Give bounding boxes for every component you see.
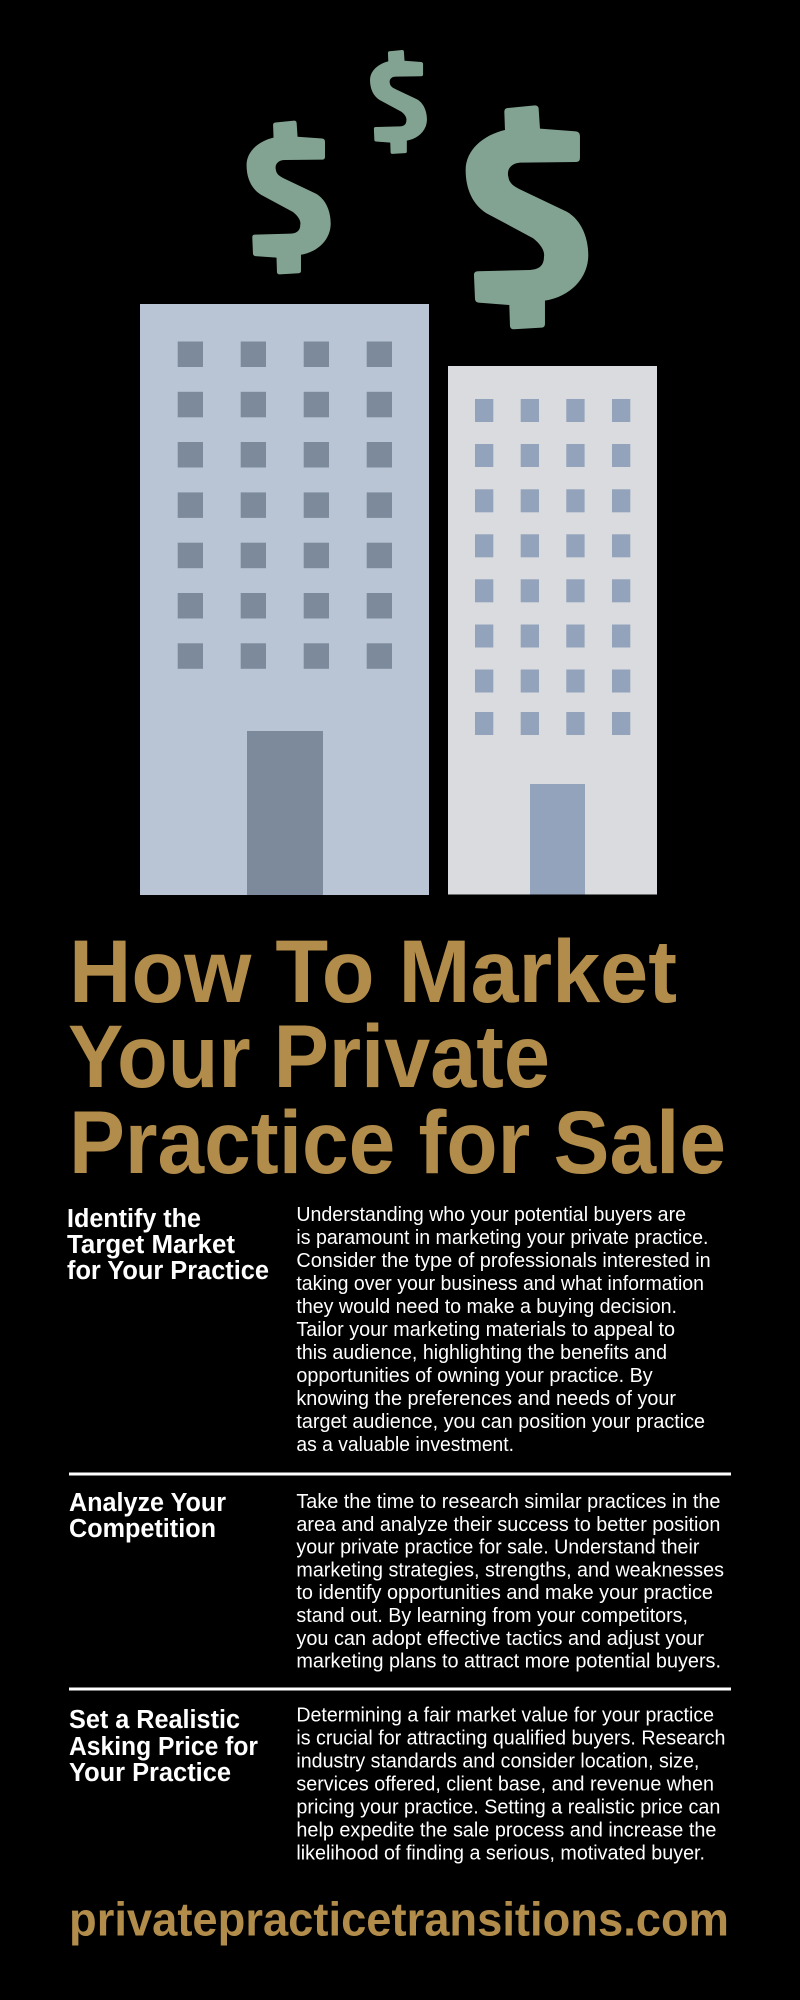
heading: set a realistic asking price: Asking Price for [69, 1733, 258, 1761]
icon: large dollar sign [466, 105, 588, 329]
text block: set a realistic asking price: help expedite the sale process and increase the [296, 1820, 716, 1842]
text block: identify the target market: Understanding who your potential buyers are [296, 1204, 686, 1226]
text block: identify the target market: is paramount in marketing your private practice. [296, 1227, 708, 1249]
text block: identify the target market: as a valuable investment. [296, 1434, 514, 1456]
text block: set a realistic asking price: is crucial for attracting qualified buyers. Research [296, 1728, 725, 1750]
title: How To Market [69, 921, 677, 1021]
heading: identify the target market [67, 1205, 269, 1285]
text block: identify the target market: this audience, highlighting the benefits and [296, 1342, 667, 1364]
text block: analyze your competition: stand out. By learning from your competitors, [296, 1605, 688, 1627]
illustration: dollar signs [247, 50, 588, 329]
heading: identify the target market: for Your Practice [67, 1257, 269, 1285]
icon: small dollar sign [370, 50, 427, 154]
illustration: large building [140, 304, 429, 895]
text block: identify the target market: Tailor your marketing materials to appeal to [296, 1319, 675, 1341]
panel: identify the target market [67, 1204, 711, 1456]
text block: identify the target market: opportunities of owning your practice. By [296, 1365, 653, 1387]
heading: set a realistic asking price: Set a Realistic [69, 1706, 240, 1734]
text block: identify the target market: they would need to make a buying decision. [296, 1296, 677, 1318]
title [68, 921, 726, 1192]
text block: analyze your competition: Take the time to research similar practices in the [296, 1491, 720, 1513]
text block: analyze your competition: to identify opportunities and make your practice [296, 1582, 713, 1604]
heading: analyze your competition: Analyze Your [69, 1489, 226, 1517]
icon: medium dollar sign [247, 121, 331, 274]
text block: set a realistic asking price [296, 1705, 725, 1864]
heading: set a realistic asking price [69, 1706, 258, 1787]
heading: set a realistic asking price: Your Practice [69, 1759, 231, 1787]
heading: analyze your competition: Competition [69, 1515, 216, 1543]
panel: analyze your competition [69, 1489, 724, 1673]
text block: set a realistic asking price: industry standards and consider location, size, [296, 1751, 699, 1773]
text block: analyze your competition: your private practice for sale. Understand their [296, 1537, 700, 1559]
text block: analyze your competition: marketing strategies, strengths, and weaknesses [296, 1559, 724, 1581]
title: Practice for Sale [69, 1092, 726, 1192]
illustration: small building [448, 366, 657, 894]
text block: analyze your competition: you can adopt effective tactics and adjust your [296, 1628, 704, 1650]
text block: identify the target market [296, 1204, 711, 1456]
text block: identify the target market: Consider the type of professionals interested in [296, 1250, 711, 1272]
text block: analyze your competition: marketing plans to attract more potential buyers. [296, 1651, 721, 1673]
heading: analyze your competition [69, 1489, 226, 1543]
text block: identify the target market: taking over your business and what information [296, 1273, 704, 1295]
text block: identify the target market: target audience, you can position your practice [296, 1411, 705, 1433]
text block: analyze your competition: area and analyze their success to better position [296, 1514, 720, 1536]
title: Your Private [68, 1006, 550, 1106]
text block: set a realistic asking price: pricing your practice. Setting a realistic price can [296, 1797, 720, 1819]
heading: identify the target market: Target Market [67, 1231, 236, 1259]
text block: set a realistic asking price: likelihood of finding a serious, motivated buyer. [296, 1842, 705, 1864]
text block: analyze your competition [296, 1491, 724, 1673]
heading: identify the target market: Identify the [67, 1205, 201, 1233]
text block: identify the target market: knowing the preferences and needs of your [296, 1388, 676, 1410]
text block: set a realistic asking price: Determining a fair market value for your practice [296, 1705, 714, 1727]
footer: website url: privatepracticetransitions.com [69, 1893, 729, 1946]
panel: set a realistic asking price [69, 1705, 725, 1864]
text block: set a realistic asking price: services offered, client base, and revenue when [296, 1774, 714, 1796]
